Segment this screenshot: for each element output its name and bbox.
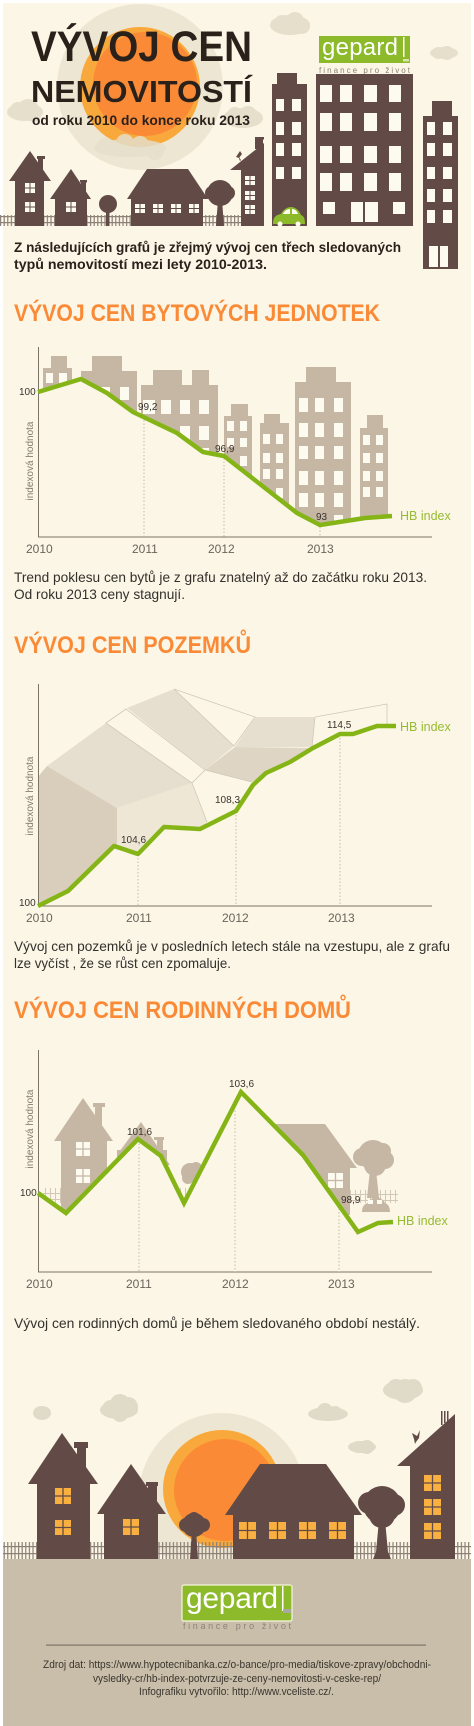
intro text: Z následujících grafů je zřejmý vývoj cen třech sledovaných — [14, 239, 401, 255]
subtitle line: nemovitostí: NEMOVITOSTÍ — [31, 74, 253, 109]
intro text: typů nemovitostí mezi lety 2010-2013. — [14, 256, 267, 272]
value labels: 101,6 — [127, 1127, 152, 1138]
chart: family houses price index — [20, 1050, 448, 1291]
axis labels: years: 2013 — [328, 1277, 355, 1291]
icon: logo gepard — [319, 34, 411, 75]
heading: byty: VÝVOJ CEN BYTOVÝCH JEDNOTEK — [14, 299, 381, 327]
chart axes — [38, 684, 432, 906]
text: land note: lze vyčíst , že se růst cen zpomaluje. — [14, 955, 231, 971]
axis labels: years — [26, 542, 334, 556]
axis labels: years: 2012 — [208, 542, 235, 556]
axis title: indexová hodnota — [25, 421, 36, 500]
icon: window mullions — [55, 1475, 441, 1539]
icon: logo gepard: finance pro život — [319, 66, 411, 75]
text: sources: Zdroj dat: https://www.hypotecnibanka.cz/o-bance/pro-media/tiskove-zpravy/obchodni- — [43, 1659, 431, 1671]
value labels: 98,9 — [341, 1195, 361, 1206]
text: sources — [43, 1659, 431, 1698]
subtitle: period: od roku 2010 do konce roku 2013 — [32, 112, 250, 128]
icon: window mullions — [25, 176, 255, 214]
axis labels: years: 2013 — [307, 542, 334, 556]
icon: logo gepard: gepard — [186, 1582, 278, 1615]
axis labels: years: 2011 — [132, 542, 158, 556]
icon: houses and apartment skyline — [0, 73, 458, 269]
axis labels: years: 2012 — [222, 1277, 249, 1291]
axis labels: years: 2013 — [328, 911, 355, 925]
text: sources: Infografiku vytvořilo: http://www.vceliste.cz/. — [139, 1686, 334, 1698]
value labels: 104,6 — [121, 835, 146, 846]
value labels: 100 — [20, 1188, 37, 1199]
icon: sun — [139, 1413, 305, 1579]
icon: land parcels — [38, 689, 387, 906]
icon: logo gepard: gepard — [322, 34, 398, 61]
intro text — [14, 239, 401, 272]
icon: logo gepard — [182, 1582, 292, 1631]
value labels — [20, 1079, 361, 1206]
icon: fence — [3, 1542, 471, 1559]
chart: land price index — [19, 684, 451, 925]
icon: sun — [57, 4, 223, 170]
axis title: indexová hodnota — [25, 1089, 36, 1168]
icon: houses and trees — [28, 1411, 455, 1559]
value labels: 100 — [19, 387, 36, 398]
value labels — [19, 387, 328, 523]
series label: HB index — [400, 509, 451, 523]
value labels: 103,6 — [229, 1079, 254, 1090]
value labels: 99,2 — [138, 402, 158, 413]
axis title: indexová hodnota — [25, 756, 36, 835]
title: VÝVOJ CEN — [31, 23, 252, 71]
text: apartments note: Trend poklesu cen bytů je z grafu znatelný až do začátku roku 2013. — [14, 569, 427, 585]
heading: pozemky: VÝVOJ CEN POZEMKŮ — [14, 629, 251, 659]
heading: rodinné domy: VÝVOJ CEN RODINNÝCH DOMŮ — [14, 994, 351, 1024]
text: apartments note: Od roku 2013 ceny stagnují. — [14, 586, 185, 602]
value labels: 93 — [316, 512, 328, 523]
icon: green car — [273, 207, 305, 226]
axis labels: years: 2010 — [26, 542, 53, 556]
axis labels: years: 2011 — [126, 911, 152, 925]
series label: HB index — [397, 1214, 448, 1228]
icon: tan houses, tree and car — [43, 1098, 398, 1225]
panel: footer illustration — [3, 1379, 471, 1726]
text: land note — [14, 938, 450, 971]
text: family houses note: Vývoj cen rodinných domů je během sledovaného období nestálý. — [14, 1315, 420, 1331]
icon: clouds — [33, 1379, 423, 1454]
icon: logo gepard: finance pro život — [183, 1621, 291, 1631]
icon: clouds — [7, 12, 458, 160]
divider line — [46, 1644, 426, 1646]
value labels: 96,9 — [215, 444, 235, 455]
axis labels: years: 2010 — [26, 911, 53, 925]
series label: HB index — [400, 720, 451, 734]
text: sources: vysledky-cr/hb-index-potvrzuje-ze-ceny-nemovitosti-v-ceske-rep/ — [93, 1673, 382, 1685]
icon: building windows — [25, 85, 452, 267]
text: land note: Vývoj cen pozemků je v posledních letech stále na vzestupu, ale z grafu — [14, 938, 450, 954]
axis labels: years: 2011 — [126, 1277, 152, 1291]
icon: lit windows — [55, 1475, 441, 1539]
line: HB index — [38, 379, 392, 525]
value labels: 108,3 — [215, 795, 240, 806]
axis labels: years: 2010 — [26, 1277, 53, 1291]
value labels: 114,5 — [327, 720, 352, 731]
axis labels: years — [26, 1277, 355, 1291]
icon: tan apartment buildings — [43, 356, 388, 532]
line: HB index — [38, 726, 396, 906]
chart: apartments price index — [19, 347, 451, 556]
text: apartments note — [14, 569, 427, 602]
value labels — [19, 720, 352, 909]
axis labels: years: 2012 — [222, 911, 249, 925]
axis labels: years — [26, 911, 355, 925]
line: HB index — [38, 1092, 393, 1232]
chart axes — [38, 1050, 432, 1272]
panel: ground — [3, 1559, 471, 1726]
panel: header illustration — [0, 4, 458, 269]
chart axes — [38, 347, 432, 537]
value labels: 100 — [19, 898, 36, 909]
